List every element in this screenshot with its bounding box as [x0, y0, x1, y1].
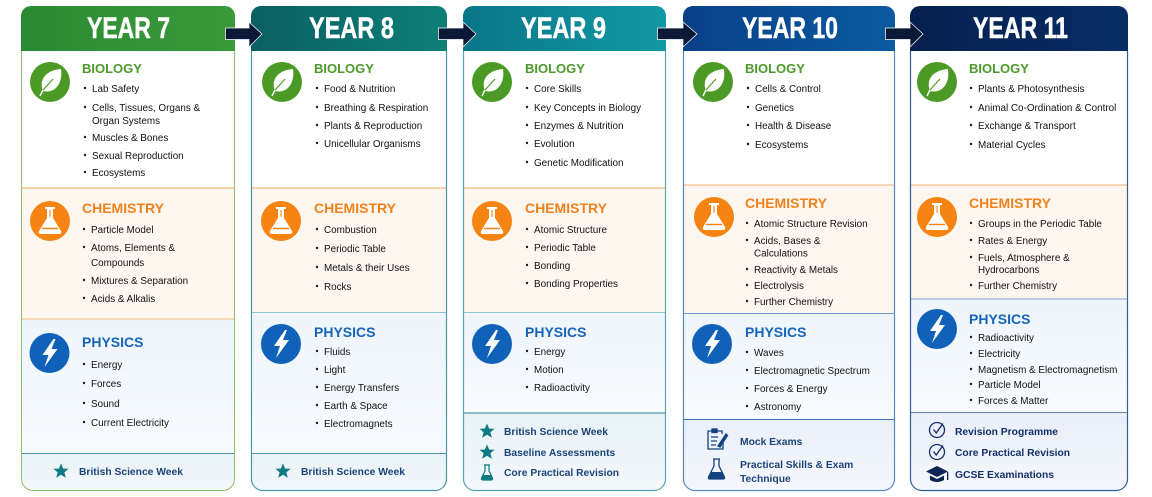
biology list: Cells & Control [755, 84, 821, 95]
header: Year 8: YEAR 8 [309, 12, 394, 45]
icon: biology leaf [693, 62, 733, 102]
biology list: Genetics [755, 103, 794, 114]
biology list: Plants & Photosynthesis [978, 84, 1085, 95]
chemistry list: Further Chemistry [978, 281, 1057, 292]
chemistry list: Compounds [91, 258, 144, 269]
chemistry list: Fuels, Atmosphere & [978, 253, 1070, 264]
arrow: Year 7 to Year 8 [226, 22, 262, 47]
biology list: Genetic Modification [534, 158, 623, 169]
chemistry list: Rates & Energy [978, 236, 1047, 247]
physics list: Light [324, 365, 346, 376]
biology list [82, 61, 201, 179]
biology list: Sexual Reproduction [92, 151, 184, 162]
chemistry list: Acids & Alkalis [91, 294, 155, 305]
physics list: Sound [91, 399, 120, 410]
physics list: Energy [91, 360, 122, 371]
chemistry list: CHEMISTRY [969, 195, 1052, 211]
physics list: Forces & Matter [978, 396, 1049, 407]
footer: British Science Week [53, 464, 183, 478]
footer: events: British Science Week [504, 427, 608, 438]
physics list [82, 334, 169, 429]
icon: clipboard [708, 429, 728, 449]
panel: Year 8 [251, 6, 447, 491]
physics list: Forces & Energy [754, 384, 828, 395]
physics list: Magnetism & Electromagnetism [978, 365, 1117, 376]
biology list: Lab Safety [92, 84, 139, 95]
chemistry list: Acids, Bases & [754, 236, 821, 247]
chemistry list: Combustion [324, 225, 377, 236]
header: Year 7 [21, 6, 235, 51]
physics list: Earth & Space [324, 401, 388, 412]
biology list: Enzymes & Nutrition [534, 121, 623, 132]
header: Year 7: YEAR 7 [87, 12, 170, 45]
physics list [969, 311, 1117, 407]
biology list [525, 61, 641, 169]
biology list: Ecosystems [92, 168, 145, 179]
biology list: Ecosystems [755, 140, 808, 151]
icon: physics bolt [917, 309, 957, 349]
biology list: Core Skills [534, 84, 581, 95]
chemistry list [969, 195, 1102, 292]
footer: events [479, 424, 619, 480]
chemistry list: CHEMISTRY [745, 195, 828, 211]
biology list: Food & Nutrition [324, 84, 395, 95]
chemistry list: Atoms, Elements & [91, 243, 175, 254]
header: Year 9 [463, 6, 666, 51]
header: Year 10 [683, 6, 895, 51]
icon: biology leaf [30, 62, 70, 102]
header: Year 8 [251, 6, 447, 51]
physics list: PHYSICS [82, 334, 143, 350]
physics list [525, 324, 590, 394]
footer: revision and exams: GCSE Examinations [955, 470, 1054, 481]
icon: chemistry flask [261, 201, 301, 241]
chemistry list [525, 200, 618, 290]
footer: revision and exams: Revision Programme [955, 427, 1058, 438]
physics list [314, 324, 399, 430]
chemistry list: Mixtures & Separation [91, 276, 188, 287]
chemistry list: Particle Model [91, 225, 154, 236]
panel: Year 11 [910, 6, 1128, 491]
chemistry list: Atomic Structure Revision [754, 219, 868, 230]
footer: British Science Week: British Science Week [79, 467, 183, 478]
footer: revision and exams: Core Practical Revision [955, 448, 1070, 459]
header: Year 10: YEAR 10 [742, 12, 838, 45]
chemistry list: Further Chemistry [754, 297, 833, 308]
biology list [314, 61, 428, 150]
icon: physics bolt [261, 324, 301, 364]
header: Year 11 [910, 6, 1128, 51]
icon: physics bolt [692, 324, 732, 364]
physics list: Particle Model [978, 380, 1041, 391]
header: Year 11: YEAR 11 [973, 12, 1068, 45]
chemistry list: Electrolysis [754, 281, 804, 292]
chemistry list [82, 200, 188, 305]
icon: chemistry flask [917, 197, 957, 237]
biology list: BIOLOGY [525, 61, 585, 76]
chemistry list: Calculations [754, 248, 808, 260]
physics list: PHYSICS [745, 324, 806, 340]
chemistry list: Periodic Table [324, 244, 386, 255]
chemistry list: Metals & their Uses [324, 263, 410, 274]
biology list [969, 61, 1116, 151]
chemistry list: CHEMISTRY [314, 200, 397, 216]
icon: flask [708, 459, 725, 479]
header: Year 9: YEAR 9 [521, 12, 606, 45]
biology list: Material Cycles [978, 140, 1046, 151]
arrow: Year 10 to Year 11 [886, 22, 923, 47]
biology list: BIOLOGY [314, 61, 374, 76]
footer: British Science Week: British Science Week [301, 467, 405, 478]
panel: Year 10 [683, 6, 895, 491]
icon: biology leaf [262, 62, 302, 102]
biology list: Organ Systems [92, 116, 160, 127]
physics list: Fluids [324, 347, 350, 358]
physics list: PHYSICS [969, 311, 1030, 327]
physics list: Energy [534, 347, 565, 358]
biology list: BIOLOGY [745, 61, 805, 76]
biology list: Exchange & Transport [978, 121, 1076, 132]
icon: graduation cap [926, 466, 948, 482]
footer: exams: Mock Exams [740, 437, 803, 448]
physics list [745, 324, 870, 413]
footer: exams [708, 429, 853, 485]
physics list: Electricity [978, 349, 1020, 360]
biology list: BIOLOGY [82, 61, 142, 76]
biology list: Health & Disease [755, 121, 832, 132]
icon: physics bolt [30, 333, 70, 373]
chemistry list: CHEMISTRY [525, 200, 608, 216]
footer: events: Core Practical Revision [504, 468, 619, 479]
biology list: Evolution [534, 139, 575, 150]
chemistry list: Reactivity & Metals [754, 265, 838, 276]
chemistry list [314, 200, 410, 293]
chemistry list: Atomic Structure [534, 225, 607, 236]
biology list: BIOLOGY [969, 61, 1029, 76]
physics list: Astronomy [754, 402, 801, 413]
biology list: Animal Co-Ordination & Control [978, 103, 1116, 114]
footer: revision and exams [926, 422, 1070, 482]
physics list: Electromagnets [324, 419, 393, 430]
physics list: PHYSICS [525, 324, 586, 340]
physics list: Electromagnetic Spectrum [754, 366, 870, 377]
icon: chemistry flask [30, 201, 70, 241]
chemistry list: Bonding [534, 261, 570, 272]
icon: chemistry flask [694, 197, 734, 237]
physics list: Waves [754, 348, 784, 359]
footer: exams: Technique [740, 474, 791, 485]
icon: biology leaf [472, 62, 512, 102]
biology list: Key Concepts in Biology [534, 103, 641, 114]
panel: Year 7 [21, 6, 235, 491]
chemistry list: Rocks [324, 282, 351, 293]
physics list: Radioactivity [534, 383, 590, 394]
physics list: Radioactivity [978, 333, 1034, 344]
physics list: Motion [534, 365, 564, 376]
physics list: Energy Transfers [324, 383, 399, 394]
biology list: Cells, Tissues, Organs & [92, 103, 201, 114]
chemistry list [745, 195, 868, 308]
icon: physics bolt [472, 324, 512, 364]
biology list: Plants & Reproduction [324, 121, 422, 132]
physics list: Current Electricity [91, 418, 169, 429]
icon: biology leaf [917, 62, 957, 102]
chemistry list: Bonding Properties [534, 279, 618, 290]
physics list: PHYSICS [314, 324, 375, 340]
biology list [745, 61, 832, 151]
biology list: Muscles & Bones [92, 133, 168, 144]
icon: chemistry flask [472, 201, 512, 241]
chemistry list: CHEMISTRY [82, 200, 165, 216]
chemistry list: Groups in the Periodic Table [978, 219, 1102, 230]
physics list: Forces [91, 379, 121, 390]
arrow: Year 9 to Year 10 [658, 22, 697, 47]
chemistry list: Hydrocarbons [978, 265, 1040, 276]
footer: British Science Week [275, 464, 405, 478]
biology list: Unicellular Organisms [324, 139, 421, 150]
footer: events: Baseline Assessments [504, 448, 616, 459]
footer: exams: Practical Skills & Exam [740, 460, 853, 471]
arrow: Year 8 to Year 9 [438, 22, 476, 47]
biology list: Breathing & Respiration [324, 103, 428, 114]
panel: Year 9 [463, 6, 666, 491]
chemistry list: Periodic Table [534, 243, 596, 254]
